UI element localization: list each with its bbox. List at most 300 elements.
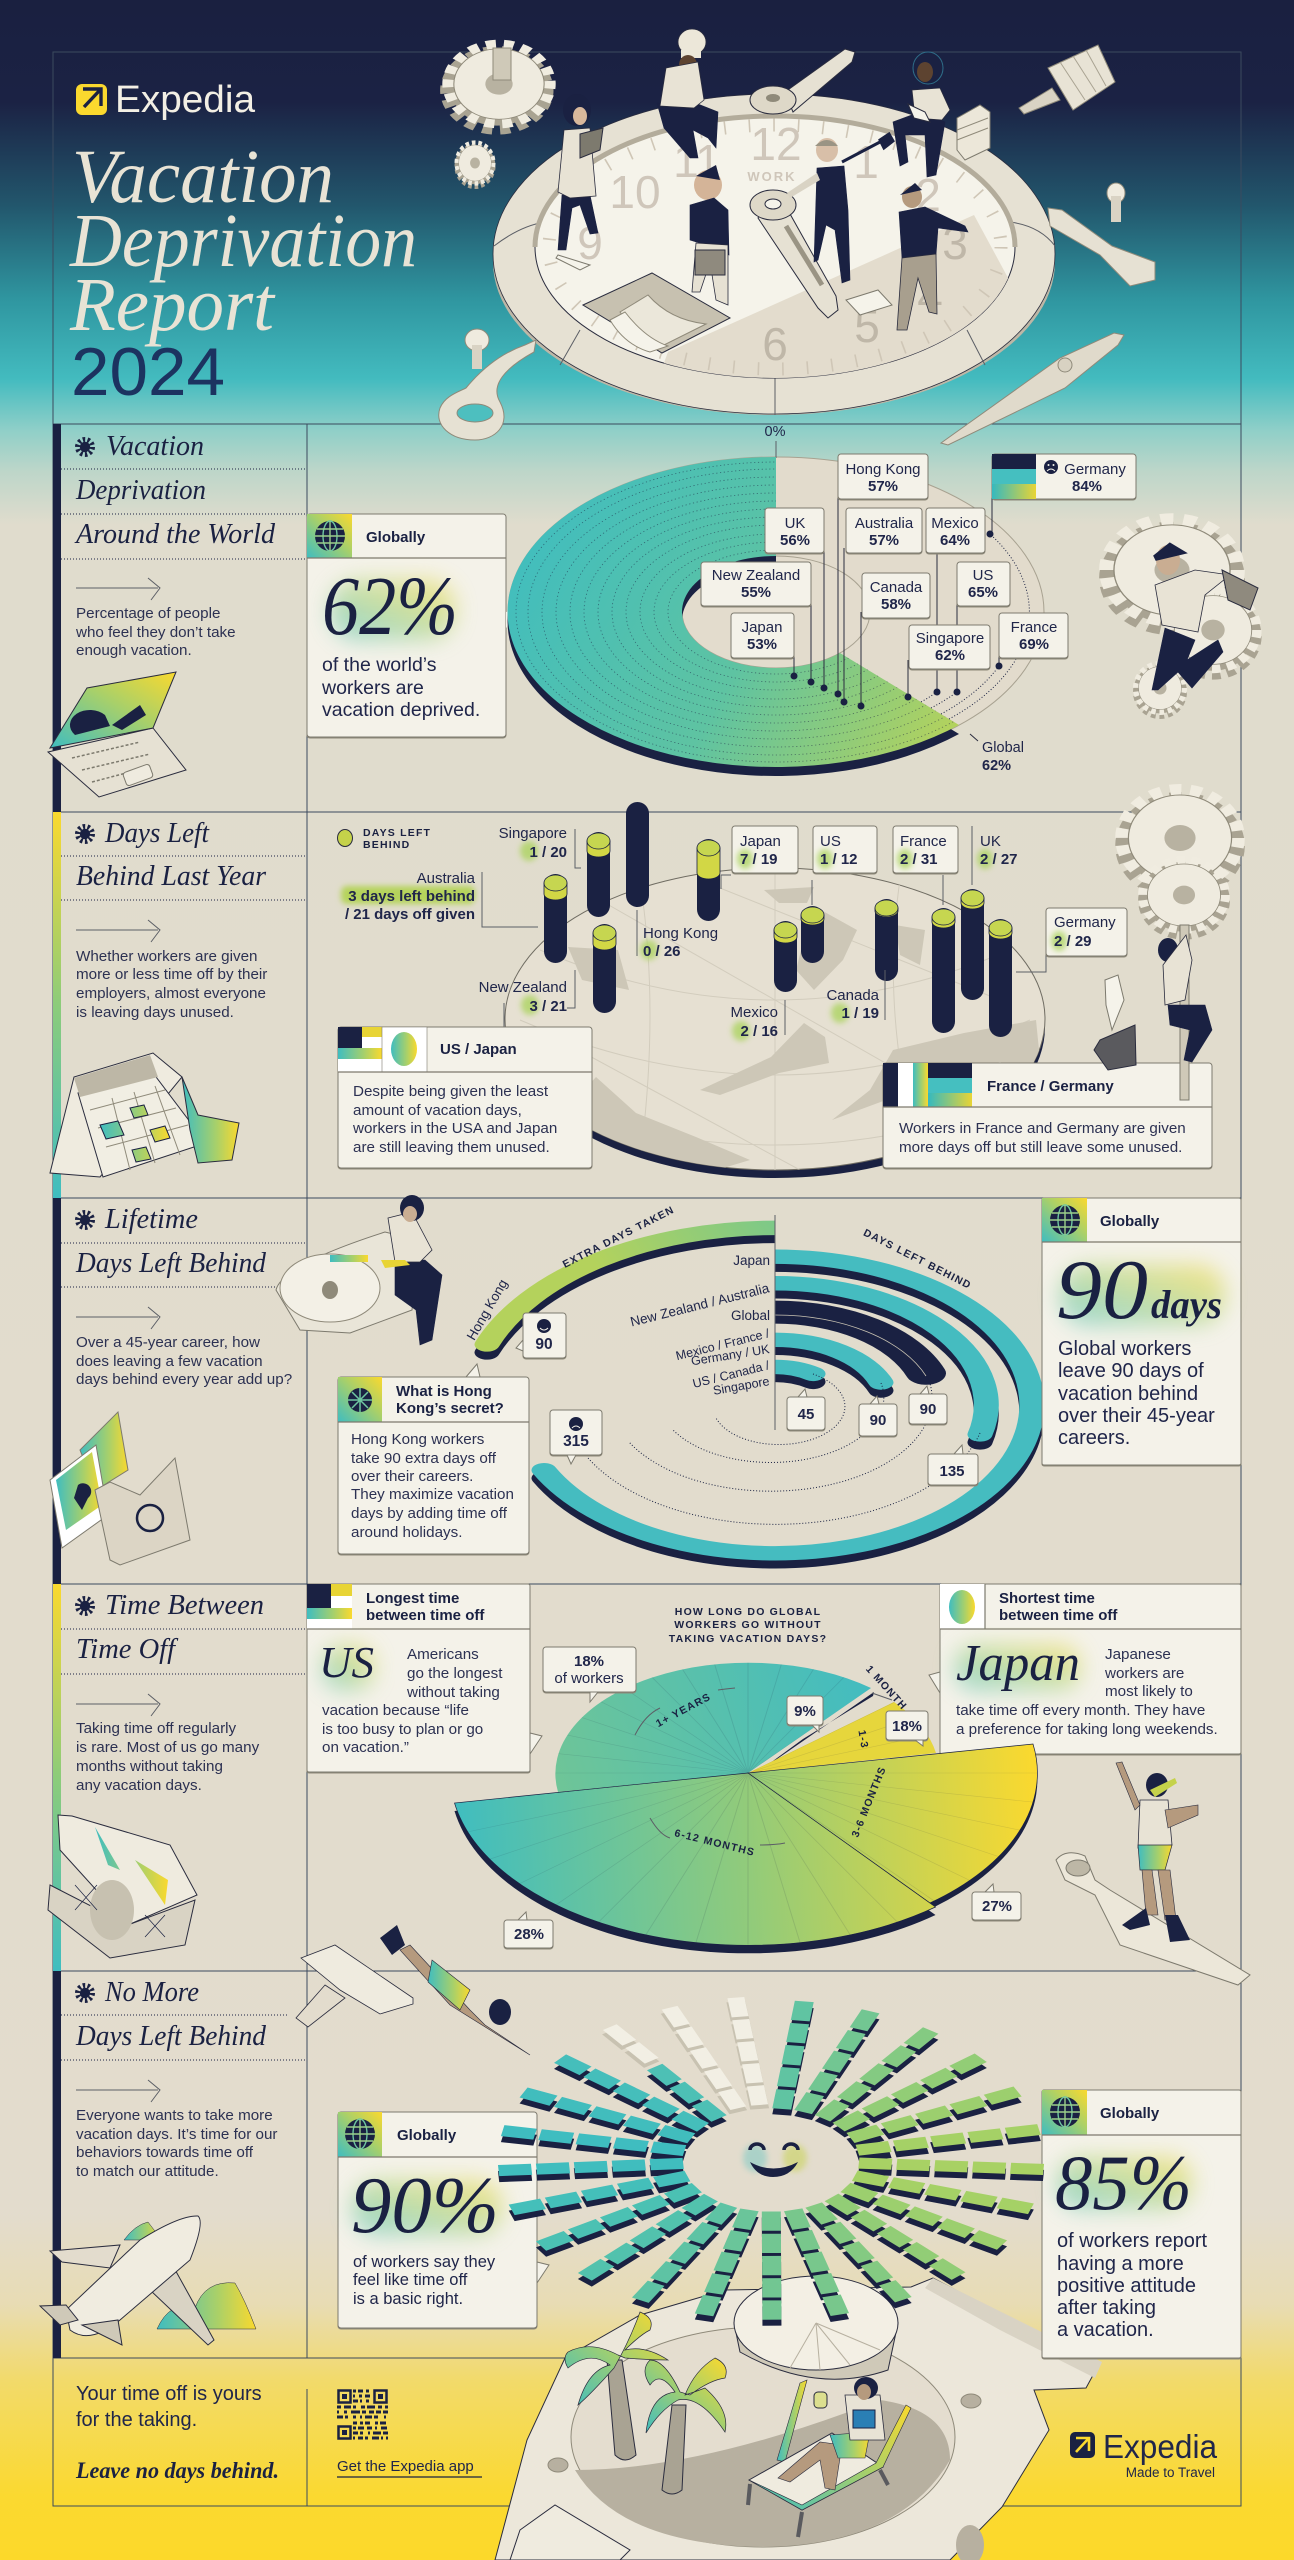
- arc labels: [464, 1204, 973, 1343]
- sector: 3-6 months: [748, 1744, 1037, 1903]
- label: France: 2 / 31: [900, 851, 938, 868]
- chart title: HOW LONG DO GLOBAL: [675, 1606, 821, 1618]
- row labels: Mexico / France /: [674, 1326, 771, 1363]
- figure: chef: [657, 29, 718, 158]
- card: globally 85%: Globally: [1100, 2105, 1160, 2122]
- rings: [544, 1257, 1032, 1561]
- label: Hong Kong: Hong Kong: [845, 461, 921, 478]
- label: Hong Kong: 0 / 26: [643, 943, 681, 960]
- section heading: No More Days Left Behind: [61, 1977, 307, 2060]
- description: enough vacation.: [76, 642, 192, 659]
- chart title: TAKING VACATION DAYS?: [669, 1633, 827, 1645]
- label: France: France: [900, 833, 947, 850]
- section heading: Days Left Behind Last Year: Days Left: [104, 818, 210, 849]
- section colour bars: [53, 424, 61, 2358]
- stat US: US: [319, 1638, 374, 1687]
- figure: man with briefcase: [690, 165, 729, 305]
- sector labels: 1 MONTH: [863, 1663, 909, 1713]
- label: Hong Kong: Hong Kong: [643, 925, 718, 942]
- coloured blocks: [497, 2000, 1046, 2321]
- spokes: [468, 1662, 1037, 1945]
- callout: 18%: 18%: [892, 1718, 922, 1735]
- stat Japan: Japan: [956, 1635, 1080, 1692]
- text: workers in the USA and Japan: [352, 1120, 557, 1137]
- icon: minute hand: [941, 333, 1124, 445]
- label: France: France: [1011, 619, 1057, 636]
- caption: a vacation.: [1057, 2319, 1154, 2341]
- card: globally 90%: Globally: [397, 2127, 457, 2144]
- caption: vacation behind: [1058, 1383, 1198, 1405]
- leader lines: [482, 826, 1046, 1035]
- figure: worker with hammer: [787, 134, 893, 283]
- sector: 1-3 months: [748, 1702, 936, 1773]
- label: Hong Kong: [643, 925, 718, 960]
- text: are still leaving them unused.: [353, 1139, 550, 1156]
- label: Canada: Canada: [826, 987, 880, 1004]
- caption: over their 45-year: [1058, 1405, 1215, 1427]
- card: Japan shortest time: between time off: [999, 1607, 1118, 1624]
- clock numerals: 11: [673, 135, 721, 187]
- number glow: [1057, 2157, 1192, 2209]
- icon: clock body: [493, 94, 1055, 415]
- row labels: US / Canada /: [691, 1358, 771, 1391]
- card: globally 90 days: Globally: [1100, 1213, 1160, 1230]
- palm tree: [645, 2358, 726, 2494]
- text: workers are: [1104, 1665, 1184, 1682]
- section heading: Days Left Behind Last Year: [61, 818, 307, 900]
- section heading: Vacation Deprivation Around the World: Vacation: [106, 431, 204, 462]
- label: Global: Global: [982, 740, 1024, 756]
- callout: 90 mid: [859, 1396, 897, 1436]
- text: without taking: [406, 1684, 500, 1701]
- caption: Global workers: [1058, 1338, 1191, 1360]
- callout: 90 extra: 90: [535, 1336, 553, 1353]
- Expedia logo: Expedia: [115, 79, 256, 121]
- label: Australia: Australia: [855, 515, 914, 532]
- label: UK: UK: [980, 833, 1001, 850]
- title: Deprivation: [69, 199, 417, 283]
- caption: feel like time off: [353, 2271, 468, 2289]
- label: US: [957, 562, 1010, 606]
- legend: DAYS LEFT: [363, 827, 431, 839]
- callout: 90 global: 90: [920, 1401, 936, 1418]
- block shadows: [497, 2006, 1046, 2327]
- caption: having a more: [1057, 2253, 1184, 2275]
- number glow: [1060, 1265, 1225, 1325]
- arc labels: Hong Kong: [464, 1277, 510, 1343]
- stat 90 days: [1056, 1243, 1222, 1337]
- text: most likely to: [1105, 1683, 1193, 1700]
- label: Australia: 57%: [869, 532, 899, 549]
- callout: 135: [928, 1445, 978, 1485]
- stat 90 days: days: [1151, 1282, 1222, 1327]
- label: Canada: [826, 987, 880, 1022]
- extrusion: [454, 1781, 936, 1953]
- pie chart: [438, 1594, 1058, 1953]
- stat 85%: 85%: [1055, 2139, 1192, 2226]
- callout: 28%: [504, 1912, 553, 1948]
- app link: Get the Expedia app: [337, 2458, 474, 2475]
- text: Workers in France and Germany are given: [899, 1120, 1186, 1137]
- icon: papers: [556, 255, 892, 315]
- label: UK: UK: [785, 515, 805, 532]
- label: Mexico: 2 / 16: [740, 1023, 778, 1040]
- chart title: WORKERS GO WITHOUT: [674, 1619, 822, 1631]
- icon: clock hand short: [750, 49, 855, 114]
- text: [351, 1431, 514, 1541]
- arrow: [76, 2080, 160, 2102]
- label: Australia: [846, 508, 922, 553]
- figure: snorkeler on clock hand: [1056, 1762, 1250, 1985]
- text: take time off every month. They have: [956, 1702, 1205, 1719]
- label: US: 65%: [968, 584, 998, 601]
- caption: careers.: [1058, 1427, 1130, 1449]
- sector labels: 6-12 MONTHS: [673, 1827, 756, 1859]
- callout: 45: [787, 1389, 825, 1430]
- caption: [1057, 2230, 1207, 2341]
- callout: 135: 135: [939, 1463, 965, 1480]
- figure: seated woman with book: [893, 52, 950, 177]
- legend: [338, 827, 431, 851]
- label: Global: 62%: [982, 758, 1011, 774]
- callout: 315: [550, 1410, 602, 1464]
- card: France / Germany: France / Germany: [987, 1078, 1114, 1095]
- card: globally 90%: [338, 2112, 549, 2328]
- Expedia logo footer: Made to Travel: [1126, 2465, 1215, 2480]
- card: Japan shortest time: Shortest time: [999, 1590, 1095, 1607]
- callout: 315: 315: [563, 1433, 589, 1450]
- label: Hong Kong: 57%: [868, 478, 898, 495]
- text: amount of vacation days,: [353, 1102, 522, 1119]
- text: [899, 1120, 1186, 1156]
- label: US: [813, 826, 877, 873]
- label: New Zealand: New Zealand: [479, 979, 567, 996]
- figure: person on sink: [276, 1195, 442, 1345]
- label: Global: [982, 740, 1024, 774]
- figure: runner on gears: [1110, 522, 1258, 715]
- label: Germany: Germany: [1064, 461, 1126, 478]
- caption: after taking: [1057, 2297, 1156, 2319]
- label: Australia: / 21 days off given: [345, 906, 475, 923]
- section heading: Days Left Behind Last Year: Behind Last Year: [76, 861, 266, 892]
- label: Singapore: [499, 825, 567, 861]
- icon: gears top left: [438, 38, 558, 137]
- label: Japan: 7 / 19: [740, 851, 778, 868]
- description: more or less time off by their: [76, 966, 267, 983]
- card: US longest time: Longest time: [366, 1590, 459, 1607]
- leader lines: [794, 495, 999, 741]
- card: Hong Kong secret: Kong’s secret?: [396, 1400, 504, 1417]
- clock numerals: 9: [577, 217, 603, 269]
- QR code: [337, 2390, 388, 2438]
- figure: diver with hammer: [296, 1925, 530, 2055]
- section heading: Vacation Deprivation Around the World: Around the World: [74, 519, 276, 550]
- palm tree: [565, 2312, 668, 2460]
- teal rings: [544, 1257, 1032, 1553]
- card: Japan shortest time: [929, 1584, 1241, 1754]
- icon: small gear: [458, 144, 492, 186]
- label: UK: [765, 508, 824, 553]
- label: Canada: 58%: [881, 596, 911, 613]
- number glow: [330, 580, 455, 640]
- callout: 90 mid: 90: [870, 1412, 886, 1429]
- row labels: Germany / UK: [690, 1342, 771, 1368]
- callout: 45: 45: [798, 1406, 814, 1423]
- callout: 9%: [787, 1696, 823, 1732]
- section heading: Lifetime Days Left Behind: Days Left Behind: [75, 1248, 267, 1279]
- label: UK: 2 / 27: [980, 851, 1018, 868]
- label: UK: [980, 833, 1018, 868]
- footer text: Leave no days behind.: [75, 2458, 279, 2483]
- section heading: Vacation Deprivation Around the World: Deprivation: [75, 475, 206, 506]
- text: Despite being given the least: [353, 1083, 549, 1100]
- icon: photos and folder: [50, 1412, 190, 1565]
- label: New Zealand: [701, 562, 811, 606]
- label: Singapore: 1 / 20: [529, 844, 567, 861]
- text: is too busy to plan or go: [322, 1721, 483, 1738]
- description: Whether workers are given: [76, 948, 257, 965]
- text: Japanese: [1105, 1646, 1171, 1663]
- label: Canada: Canada: [870, 579, 923, 596]
- description: is rare. Most of us go many: [76, 1739, 260, 1756]
- row labels: [629, 1253, 771, 1398]
- label: Australia: Australia: [417, 870, 476, 887]
- icon: stack of books: [957, 105, 990, 160]
- callout: 27%: 27%: [982, 1898, 1012, 1915]
- card: Hong Kong secret: [338, 1364, 529, 1554]
- card: US / Japan: [338, 1027, 592, 1168]
- label: Germany: Germany: [1054, 914, 1116, 931]
- card: globally 90 days: [1042, 1198, 1241, 1465]
- sector labels: 1-3: [855, 1729, 870, 1750]
- label: Japan: Japan: [742, 619, 782, 636]
- dotted rings: [516, 462, 954, 762]
- clock numerals: [577, 118, 968, 370]
- callout: 9%: 9%: [794, 1703, 816, 1720]
- text: take 90 extra days off: [351, 1450, 497, 1467]
- arrow: [76, 1307, 160, 1329]
- section heading: No More Days Left Behind: Days Left Behind: [75, 2021, 267, 2052]
- text: They maximize vacation: [351, 1486, 514, 1503]
- label: Germany: 84%: [1072, 478, 1102, 495]
- title: Report: [69, 263, 276, 347]
- beige blocks: [609, 2000, 760, 2112]
- description: [76, 948, 267, 1021]
- caption: is a basic right.: [353, 2290, 463, 2308]
- description: [76, 1334, 292, 1388]
- section heading: Lifetime Days Left Behind: Lifetime: [104, 1204, 198, 1235]
- illustration: beach watch back: [495, 2276, 1102, 2560]
- description: days behind every year add up?: [76, 1371, 292, 1388]
- arrow: [76, 1694, 160, 1716]
- leader dots: [790, 530, 1002, 710]
- clock numerals: 10: [609, 166, 661, 218]
- label: Australia: [341, 870, 476, 923]
- row labels: Global: [731, 1308, 770, 1323]
- callout: 18% of workers: of workers: [554, 1670, 624, 1687]
- arrow: [76, 920, 160, 942]
- figure: climber on gears: [1094, 792, 1235, 1100]
- row labels: Japan: [733, 1253, 770, 1268]
- icon: calendar: [50, 1053, 239, 1177]
- card: US / Japan: US / Japan: [440, 1041, 517, 1058]
- text: on vacation.”: [322, 1739, 409, 1756]
- clock numerals: 4: [917, 270, 943, 322]
- section heading: No More Days Left Behind: No More: [104, 1977, 199, 2008]
- Expedia logo footer: [1070, 2428, 1218, 2480]
- label: New Zealand: 3 / 21: [529, 998, 567, 1015]
- arc labels: EXTRA DAYS TAKEN: [561, 1204, 677, 1271]
- section heading: Time Between Time Off: Time Off: [76, 1634, 178, 1665]
- bars: [544, 802, 1012, 1037]
- description: vacation days. It’s time for our: [76, 2126, 277, 2143]
- label: US: US: [973, 567, 993, 584]
- card: globally 62%: Globally: [366, 529, 426, 546]
- label: New Zealand: 55%: [741, 584, 771, 601]
- description: to match our attitude.: [76, 2163, 219, 2180]
- clock numerals: 6: [762, 318, 788, 370]
- caption: leave 90 days of: [1058, 1360, 1204, 1382]
- text: over their careers.: [351, 1468, 473, 1485]
- footer text: Your time off is yours: [76, 2383, 262, 2405]
- callout: 27%: [972, 1884, 1021, 1920]
- card: US longest time: between time off: [366, 1607, 485, 1624]
- icon: laptop: [48, 672, 186, 797]
- description: Over a 45-year career, how: [76, 1334, 260, 1351]
- umbrella: [734, 2276, 898, 2462]
- description: employers, almost everyone: [76, 985, 266, 1002]
- label: Japan: Japan: [740, 833, 781, 850]
- icon: hook bottom left: [439, 329, 536, 440]
- label: France: 69%: [1019, 636, 1049, 653]
- description: Taking time off regularly: [76, 1720, 237, 1737]
- label: Mexico: Mexico: [730, 1004, 778, 1021]
- number glow: [352, 2180, 502, 2235]
- section heading: Time Between Time Off: Time Between: [105, 1590, 264, 1621]
- callout: 28%: 28%: [514, 1926, 544, 1943]
- value glows: [520, 841, 1067, 1041]
- clock numerals: 12: [750, 118, 802, 170]
- clock numerals: 1: [853, 136, 879, 188]
- text: Hong Kong workers: [351, 1431, 485, 1448]
- sector labels: 1+ YEARS: [654, 1691, 713, 1730]
- icon: suitcase: [48, 1815, 197, 1958]
- description: months without taking: [76, 1758, 223, 1775]
- label: Australia: 3 days left behind: [348, 888, 475, 905]
- label: France: [893, 826, 958, 873]
- callout: 18% of workers: 18%: [574, 1653, 604, 1670]
- label: Singapore: 62%: [935, 647, 965, 664]
- Hong Kong ring: [487, 1228, 775, 1352]
- callout: 18% of workers: [543, 1647, 636, 1702]
- 0% label: 0%: [765, 424, 786, 440]
- card: globally 62%: [307, 514, 518, 737]
- sun of day blocks: [497, 1996, 1046, 2327]
- label: Japan: [731, 613, 794, 658]
- label: Germany: [1046, 908, 1127, 956]
- dotted continuations: [588, 1373, 980, 1524]
- sector labels: [635, 1663, 909, 1859]
- figure: woman with clipboard: [558, 94, 603, 250]
- callout: 18%: [886, 1711, 928, 1746]
- icon: hook right: [1048, 183, 1155, 286]
- text: around holidays.: [351, 1524, 462, 1541]
- clock numerals: 2: [915, 169, 941, 221]
- text: more days off but still leave some unused.: [899, 1139, 1182, 1156]
- row labels: New Zealand / Australia: [629, 1280, 771, 1329]
- legend: BEHIND: [363, 839, 410, 851]
- description: Everyone wants to take more: [76, 2107, 273, 2124]
- smiley face: [743, 2144, 807, 2177]
- clock numerals: 3: [942, 217, 968, 269]
- caption: of workers report: [1057, 2230, 1207, 2252]
- clock numerals: WORK: [747, 169, 797, 184]
- section heading: Lifetime Days Left Behind: [61, 1204, 307, 1287]
- figure: person on lounger: [748, 2377, 911, 2537]
- label: Canada: [862, 573, 930, 618]
- text: go the longest: [407, 1665, 503, 1682]
- label: Germany: [992, 454, 1136, 499]
- footer text: [75, 2383, 279, 2483]
- caption: of the world’s: [322, 654, 437, 676]
- caption: vacation deprived.: [322, 699, 480, 721]
- stat 90 days: 90: [1056, 1243, 1148, 1337]
- caption: [321, 654, 480, 721]
- watch body: [495, 2278, 1102, 2560]
- label: Singapore: Singapore: [499, 825, 567, 842]
- icon: airplane: [40, 2216, 256, 2345]
- callout: 90 extra: [516, 1313, 566, 1358]
- caption: [1058, 1338, 1215, 1449]
- icon: clock hand long: [750, 190, 838, 318]
- card: globally 85%: [1042, 2090, 1241, 2358]
- label: Mexico: [730, 1004, 778, 1040]
- description: is leaving days unused.: [76, 1004, 234, 1021]
- caption: positive attitude: [1057, 2275, 1196, 2297]
- caption: [353, 2253, 496, 2308]
- description: [76, 1720, 260, 1794]
- caption: of workers say they: [353, 2253, 496, 2271]
- caption: workers are: [321, 677, 424, 699]
- figure: man on phone: [897, 183, 968, 330]
- label: US: US: [820, 833, 841, 850]
- donut chart: [508, 424, 1136, 776]
- icon: pinion top right: [1019, 45, 1115, 114]
- row labels: Singapore: [712, 1374, 771, 1398]
- global ring: [775, 1312, 926, 1373]
- label: Canada: 1 / 19: [841, 1005, 879, 1022]
- label: Singapore: [909, 625, 990, 669]
- label: Japan: [732, 826, 798, 873]
- sector: 6-12 months: [454, 1773, 936, 1945]
- globe: [505, 868, 1045, 1178]
- title: Vacation: [72, 135, 334, 219]
- label: Singapore: Singapore: [916, 630, 984, 647]
- description: [76, 2107, 277, 2180]
- label: New Zealand: [479, 979, 567, 1015]
- illustration: clock with workers: [438, 29, 1155, 445]
- label: US: 1 / 12: [820, 851, 858, 868]
- card: Hong Kong secret: What is Hong: [396, 1383, 492, 1400]
- chart title: [669, 1606, 827, 1645]
- card: France / Germany: [883, 1063, 1212, 1168]
- text: a preference for taking long weekends.: [956, 1721, 1218, 1738]
- number glow: [322, 1645, 374, 1690]
- section heading: Time Between Time Off: [61, 1590, 307, 1674]
- text: days by adding time off: [351, 1505, 508, 1522]
- text: [956, 1646, 1218, 1738]
- description: who feel they don’t take: [75, 624, 236, 641]
